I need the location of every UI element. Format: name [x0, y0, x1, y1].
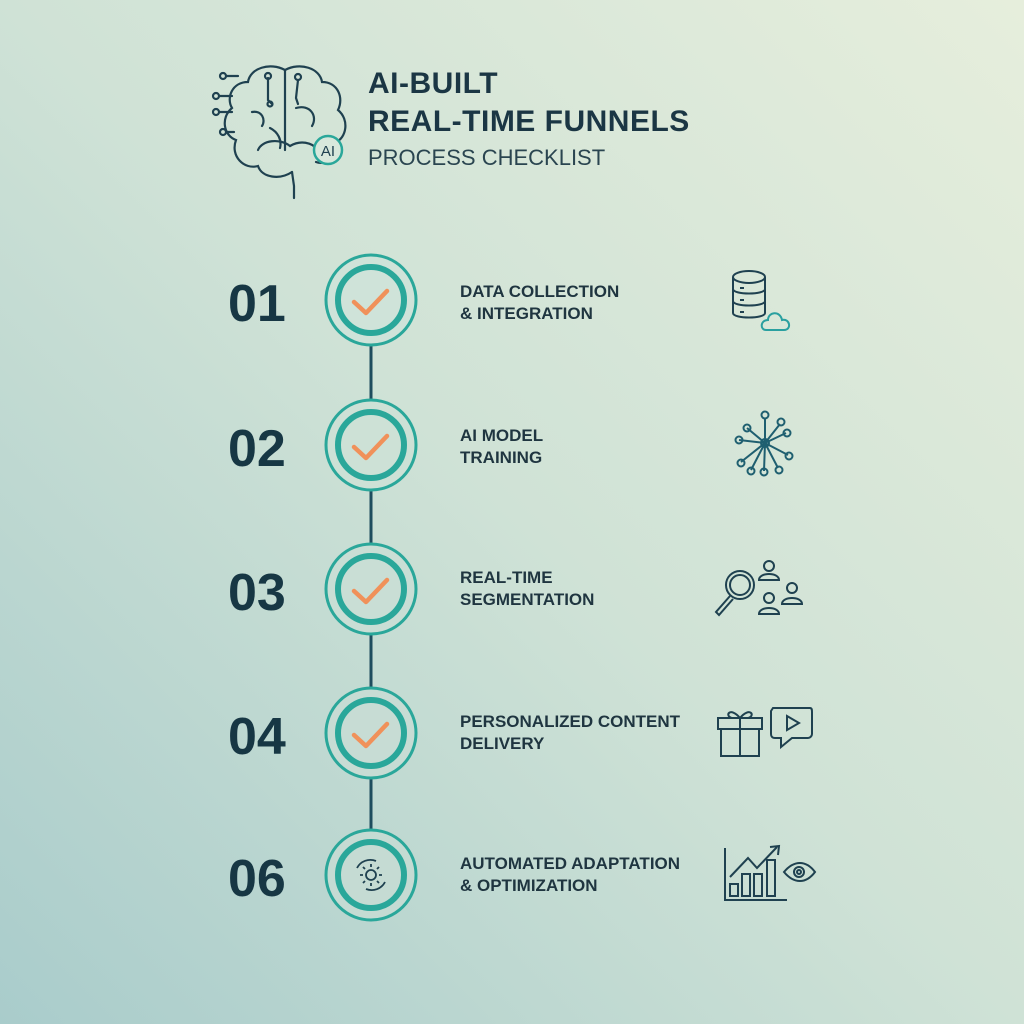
step 03: REAL-TIME [460, 568, 553, 587]
icon: gift and video [718, 708, 812, 756]
step 02: TRAINING [460, 448, 542, 467]
step 03: SEGMENTATION [460, 590, 594, 609]
title: REAL-TIME FUNNELS [368, 105, 690, 138]
step 04: DELIVERY [460, 734, 545, 753]
title: PROCESS CHECKLIST [368, 145, 605, 170]
step 04 [228, 688, 681, 778]
step 01: 01 [228, 275, 286, 333]
step 03 [228, 544, 594, 634]
step 02: 02 [228, 420, 286, 478]
step 03: 03 [228, 564, 286, 622]
icon: growth chart eye [725, 846, 815, 900]
timeline line [370, 300, 372, 875]
step 06: & OPTIMIZATION [460, 876, 598, 895]
icon: brain [213, 66, 345, 198]
icon: database cloud [733, 271, 789, 330]
step 01 [228, 255, 619, 345]
step 06: 06 [228, 850, 286, 908]
step 01: DATA COLLECTION [460, 282, 619, 301]
step 01: & INTEGRATION [460, 304, 593, 323]
title: AI-BUILT [368, 67, 498, 100]
step 06 [228, 830, 680, 920]
step 04: 04 [228, 708, 286, 766]
title [368, 67, 690, 170]
step 06: AUTOMATED ADAPTATION [460, 854, 680, 873]
step 02: AI MODEL [460, 426, 543, 445]
step 02 [228, 400, 543, 490]
icon: search people [716, 561, 802, 615]
step 04: PERSONALIZED CONTENT [460, 712, 681, 731]
icon: network [736, 412, 792, 476]
icon: AI badge: AI [321, 143, 335, 160]
icon: AI badge [314, 136, 342, 164]
